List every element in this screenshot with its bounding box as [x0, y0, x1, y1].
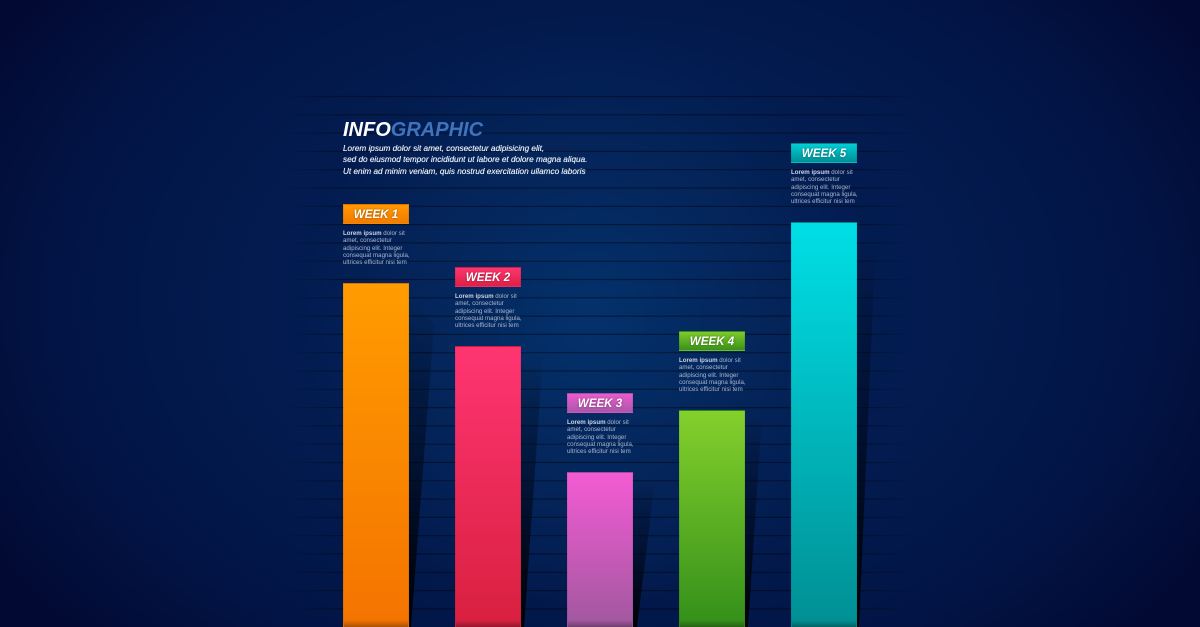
week 1 text: amet, consectetur — [343, 237, 392, 244]
week 5 text: adipiscing elit. Integer — [791, 184, 850, 191]
week 3 label — [567, 393, 633, 413]
week 5 text — [791, 169, 858, 205]
week 1 text: ultrices efficitur nisi tem — [343, 259, 407, 266]
week 4 label: WEEK 4 — [690, 335, 734, 348]
week 4 bar — [679, 410, 745, 627]
week 4 text: ultrices efficitur nisi tem — [679, 386, 743, 393]
week 4 label — [679, 331, 745, 351]
week 1 label — [343, 204, 409, 224]
week 1 text: Lorem ipsum dolor sit — [343, 230, 405, 237]
title: INFOGRAPHIC — [343, 119, 483, 141]
intro text: Lorem ipsum dolor sit amet, consectetur adipisicing elit, — [343, 144, 544, 152]
intro text — [342, 144, 587, 176]
week 1 text: consequat magna ligula, — [343, 252, 410, 259]
week 3 text: adipiscing elit. Integer — [567, 434, 626, 441]
week 4 text: amet, consectetur — [679, 364, 728, 371]
week 5 label — [791, 143, 857, 163]
week 5 text: Lorem ipsum dolor sit — [791, 169, 853, 176]
week 1 label: WEEK 1 — [354, 208, 398, 221]
week 4 text — [679, 357, 746, 393]
week 5 label: WEEK 5 — [802, 147, 846, 160]
week 2 label: WEEK 2 — [466, 271, 510, 284]
week 2 text: amet, consectetur — [455, 300, 504, 307]
week 5 text: amet, consectetur — [791, 176, 840, 183]
week 3 bar — [567, 472, 633, 627]
intro text: Ut enim ad minim veniam, quis nostrud exercitation ullamco laboris — [343, 167, 586, 176]
week 1 text: adipiscing elit. Integer — [343, 245, 402, 252]
week 4 text: consequat magna ligula, — [679, 379, 746, 386]
week 3 text: amet, consectetur — [567, 426, 616, 433]
week 2 label — [455, 267, 521, 287]
week 2 text: consequat magna ligula, — [455, 315, 522, 322]
week 4 text: adipiscing elit. Integer — [679, 372, 738, 379]
week 1 bar — [343, 283, 409, 627]
week 3 text — [567, 419, 634, 455]
week 5 text: consequat magna ligula, — [791, 191, 858, 198]
week 4 text: Lorem ipsum dolor sit — [679, 357, 741, 364]
week 3 text: Lorem ipsum dolor sit — [567, 419, 629, 426]
week 2 text: adipiscing elit. Integer — [455, 308, 514, 315]
week 5 text: ultrices efficitur nisi tem — [791, 198, 855, 205]
week 5 bar — [791, 222, 857, 627]
bar shadows — [409, 240, 875, 627]
week 2 bar — [455, 346, 521, 627]
intro text: sed do eiusmod tempor incididunt ut labore et dolore magna aliqua. — [343, 155, 587, 164]
week 3 text: consequat magna ligula, — [567, 441, 634, 448]
week 3 text: ultrices efficitur nisi tem — [567, 448, 631, 455]
week 2 text — [455, 293, 522, 329]
week 3 label: WEEK 3 — [578, 397, 622, 410]
week 1 text — [343, 230, 410, 266]
week 2 text: ultrices efficitur nisi tem — [455, 322, 519, 329]
week 2 text: Lorem ipsum dolor sit — [455, 293, 517, 300]
